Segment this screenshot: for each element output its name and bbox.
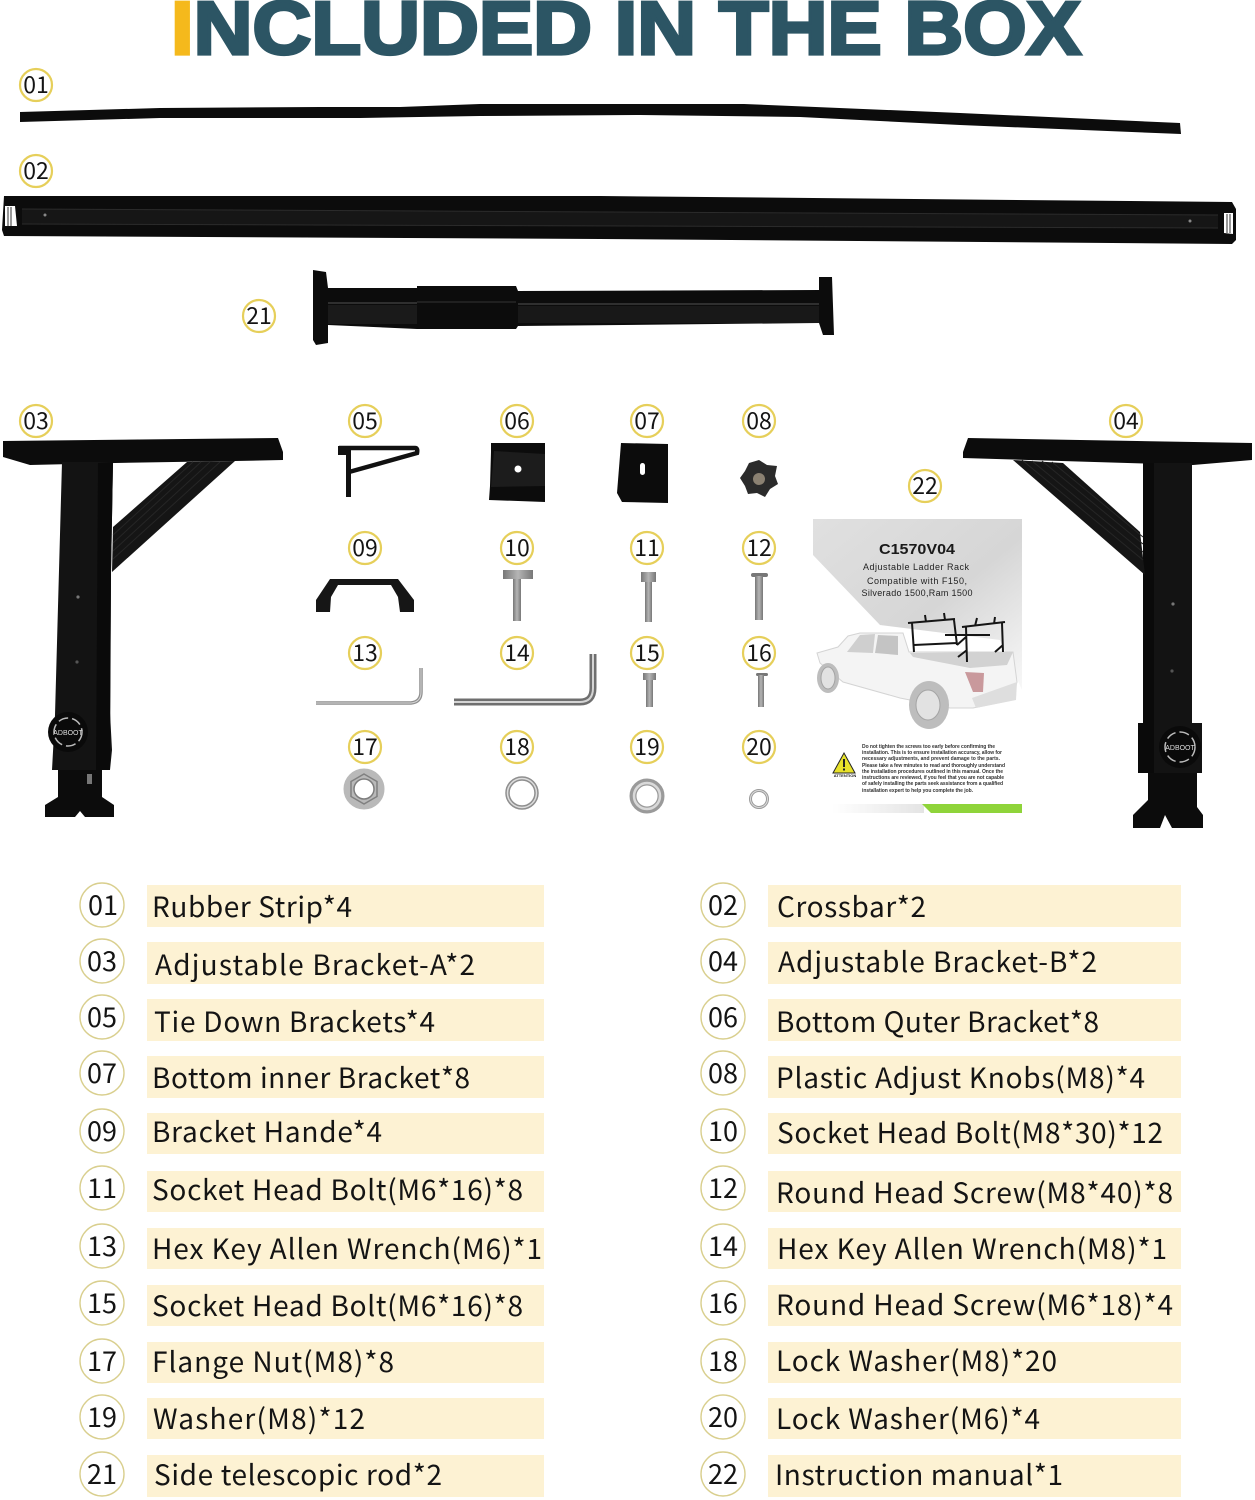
- item 21: side telescopic rod: [243, 270, 834, 345]
- manual warning text: of safely installing the parts seek assistance from a qualified: [862, 781, 1003, 787]
- truck illustration: [817, 613, 1017, 729]
- tag 18: 18: [504, 728, 530, 762]
- row 21: [80, 1452, 544, 1497]
- row 05: [80, 995, 544, 1041]
- row 06: Bottom Quter Bracket*8: [776, 1001, 1099, 1041]
- row 09: [80, 1109, 544, 1154]
- row 21: Side telescopic rod*2: [154, 1454, 442, 1494]
- tag 15: 15: [634, 634, 660, 668]
- row 15: Socket Head Bolt(M6*16)*8: [152, 1285, 523, 1325]
- item 19: washer M8: [631, 728, 663, 810]
- item 07: bottom inner bracket: [617, 402, 668, 503]
- tag 20: 20: [746, 728, 772, 762]
- manual warning text: Please take a few minutes to read and thoroughly understand: [862, 763, 1005, 769]
- row 14: Hex Key Allen Wrench(M8)*1: [777, 1228, 1167, 1268]
- tag 05: 05: [352, 402, 378, 436]
- tag 11: 11: [634, 529, 660, 563]
- tag 21: 21: [246, 297, 272, 331]
- row 10: Socket Head Bolt(M8*30)*12: [777, 1112, 1163, 1152]
- row 04: 04: [708, 940, 738, 979]
- item 06: bottom outer bracket: [489, 402, 545, 502]
- row 19: Washer(M8)*12: [153, 1398, 365, 1438]
- tag 06: 06: [504, 402, 530, 436]
- attention icon: ATTENTION: [834, 773, 856, 778]
- item 15: socket head bolt M6x16: [631, 634, 663, 707]
- row 20: 20: [708, 1396, 738, 1435]
- row 21: 21: [87, 1453, 117, 1492]
- row 22: [701, 1452, 1181, 1497]
- item 03: adjustable bracket A: [3, 402, 283, 817]
- row 16: Round Head Screw(M6*18)*4: [776, 1284, 1173, 1324]
- row 02: [701, 883, 1181, 927]
- item 09: bracket handle: [316, 529, 414, 612]
- manual warning text: the installation procedures outlined in this manual. Once the: [862, 769, 1003, 775]
- row 09: 09: [87, 1110, 117, 1149]
- tag 17: 17: [352, 728, 378, 762]
- item 18: lock washer M8: [501, 728, 536, 808]
- row 15: 15: [87, 1282, 117, 1321]
- tag 02: 02: [23, 152, 49, 186]
- row 05: Tie Down Brackets*4: [154, 1001, 435, 1041]
- item 20: lock washer M6: [743, 728, 775, 808]
- item 04: adjustable bracket B: [963, 402, 1252, 828]
- row 01: Rubber Strip*4: [152, 886, 352, 926]
- manual warning text: installation expert to help you complete the job.: [862, 788, 974, 794]
- row 20: Lock Washer(M6)*4: [776, 1398, 1040, 1438]
- row 22: Instruction manual*1: [775, 1454, 1063, 1494]
- item 12: round head screw M8x40: [743, 529, 775, 620]
- row 01: 01: [88, 884, 118, 923]
- row 18: [701, 1339, 1181, 1383]
- tag 22: 22: [912, 467, 938, 501]
- row 03: Adjustable Bracket-A*2: [155, 944, 475, 984]
- manual warning text: instructions are reviewed, if you feel that you are not capable: [862, 775, 1004, 781]
- row 16: 16: [708, 1282, 738, 1321]
- row 03: [80, 939, 544, 984]
- attention icon: [833, 753, 856, 778]
- row 07: Bottom inner Bracket*8: [152, 1057, 470, 1097]
- tag 01: 01: [23, 66, 49, 100]
- item 11: socket head bolt M6x16: [631, 529, 663, 622]
- tag 07: 07: [634, 402, 660, 436]
- item 22: instruction manual: C1570V04: [879, 541, 956, 558]
- row 08: [701, 1051, 1181, 1098]
- row 13: 13: [87, 1225, 117, 1264]
- tag 19: 19: [634, 728, 660, 762]
- row 10: 10: [708, 1110, 738, 1149]
- row 11: Socket Head Bolt(M6*16)*8: [152, 1169, 523, 1209]
- item 02: crossbar: [2, 152, 1236, 244]
- row 06: [701, 995, 1181, 1041]
- tag 09: 09: [352, 529, 378, 563]
- item 22: instruction manual: [813, 467, 1022, 813]
- row 05: 05: [87, 996, 117, 1035]
- row 09: Bracket Hande*4: [152, 1111, 382, 1151]
- row 03: 03: [87, 940, 117, 979]
- row 04: Adjustable Bracket-B*2: [778, 941, 1097, 981]
- row 02: Crossbar*2: [777, 886, 926, 926]
- manual warning text: necessary adjustments, and prevent damage to the parts.: [862, 756, 1001, 762]
- row 11: 11: [87, 1167, 117, 1206]
- item 04: adjustable bracket B: ADBOOT: [1165, 745, 1196, 752]
- parts list: left column: [80, 883, 544, 1497]
- row 04: [701, 939, 1181, 984]
- row 12: Round Head Screw(M8*40)*8: [776, 1172, 1173, 1212]
- tag 12: 12: [746, 529, 772, 563]
- tag 08: 08: [746, 402, 772, 436]
- row 08: Plastic Adjust Knobs(M8)*4: [776, 1057, 1145, 1097]
- row 18: Lock Washer(M8)*20: [776, 1340, 1057, 1380]
- item 16: round head screw M6x18: [743, 634, 775, 707]
- item 05: tie down bracket: [338, 402, 417, 497]
- row 17: Flange Nut(M8)*8: [152, 1341, 394, 1381]
- item 13: hex key M6: [316, 634, 421, 703]
- row 13: Hex Key Allen Wrench(M6)*1: [152, 1228, 542, 1268]
- tag 04: 04: [1113, 402, 1139, 436]
- tag 14: 14: [504, 634, 530, 668]
- item 22: instruction manual: Compatible with F150,: [867, 576, 967, 586]
- item 17: flange nut: [348, 728, 381, 804]
- row 08: 08: [708, 1052, 738, 1091]
- row 07: 07: [87, 1052, 117, 1091]
- row 02: 02: [708, 884, 738, 923]
- manual warning text: Do not tighten the screws too early before confirming the: [862, 744, 995, 750]
- row 01: [80, 883, 544, 927]
- row 14: 14: [708, 1225, 738, 1264]
- row 06: 06: [708, 996, 738, 1035]
- tag 10: 10: [504, 529, 530, 563]
- item 08: plastic adjust knob: [740, 402, 778, 497]
- row 17: 17: [87, 1340, 117, 1379]
- row 17: [80, 1339, 544, 1383]
- tag 13: 13: [352, 634, 378, 668]
- item 22: instruction manual: Adjustable Ladder Rack: [863, 562, 970, 572]
- item 10: socket head bolt M8x30: [501, 529, 533, 621]
- item 14: hex key M8: [454, 634, 593, 702]
- manual warning text: [862, 744, 1005, 794]
- row 19: [80, 1395, 544, 1439]
- item 22: instruction manual: Silverado 1500,Ram 1500: [862, 588, 972, 598]
- row 12: 12: [708, 1167, 738, 1206]
- row 11: [80, 1166, 544, 1212]
- item 03: adjustable bracket A: ADBOOT: [53, 730, 84, 737]
- row 07: [80, 1051, 544, 1098]
- row 20: [701, 1395, 1181, 1439]
- tag 16: 16: [746, 634, 772, 668]
- row 22: 22: [708, 1453, 738, 1492]
- tag 03: 03: [23, 402, 49, 436]
- item 01: rubber strip: [20, 66, 1181, 134]
- row 18: 18: [708, 1340, 738, 1379]
- manual warning text: installation. This is to ensure installation accuracy, allow for: [862, 750, 1002, 756]
- row 19: 19: [87, 1396, 117, 1435]
- parts list: right column: [701, 883, 1181, 1497]
